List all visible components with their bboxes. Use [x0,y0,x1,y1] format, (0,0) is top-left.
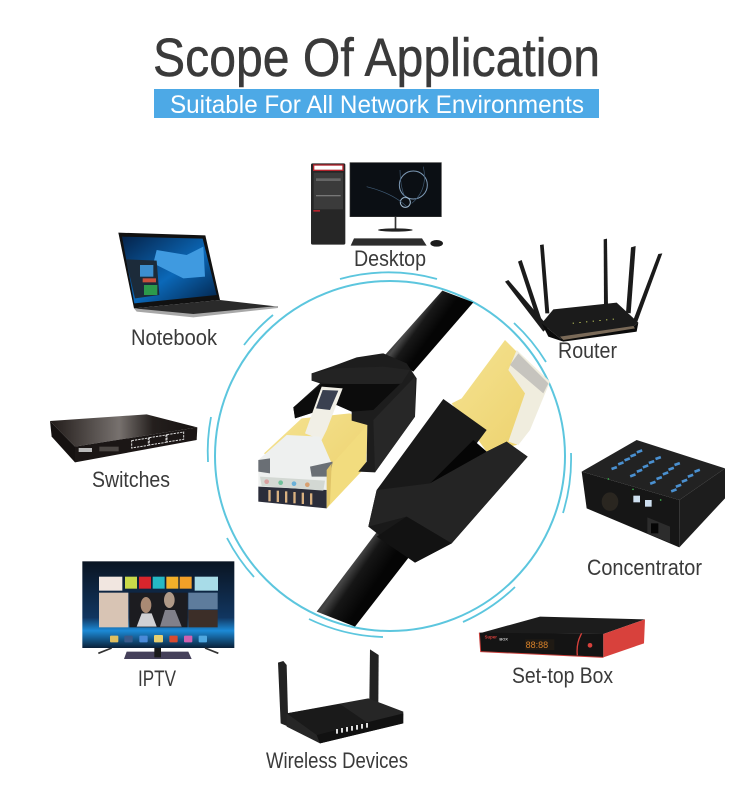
icon: notebook [118,233,278,317]
label: iptv: IPTV [138,666,176,691]
right plug cable [317,530,415,627]
left plug latch [305,387,343,440]
icon: wireless device [278,649,403,743]
icon: desktop [311,163,443,247]
ethernet cable [258,291,550,627]
label: notebook: Notebook [131,325,218,350]
icon: set-top box: 88:88 [526,640,548,650]
subtitle banner: Suitable For All Network Environments [170,91,584,119]
icon: set-top box: BOX [499,637,508,642]
right plug gold shield [452,340,548,452]
icon: router [505,239,662,342]
icon: switch [50,414,197,462]
icon: iptv [82,561,234,659]
left plug gold shield [264,413,367,508]
label: wireless devices: Wireless Devices [266,748,408,773]
left plug clear head [258,435,332,508]
label: router: Router [558,338,617,363]
label: switches: Switches [92,467,170,492]
label: set-top box: Set-top Box [512,663,613,688]
label: desktop: Desktop [354,246,426,271]
icon: set-top box [479,617,645,657]
icon: concentrator [582,440,725,547]
label: concentrator: Concentrator [587,555,702,580]
right plug clear head [508,350,550,445]
right plug boot [368,399,528,563]
title: Scope Of Application [153,28,600,88]
left plug boot [293,353,417,472]
icon: set-top box: Super [485,634,497,639]
left plug cable [385,291,473,372]
circle frame with arcs [208,272,571,637]
